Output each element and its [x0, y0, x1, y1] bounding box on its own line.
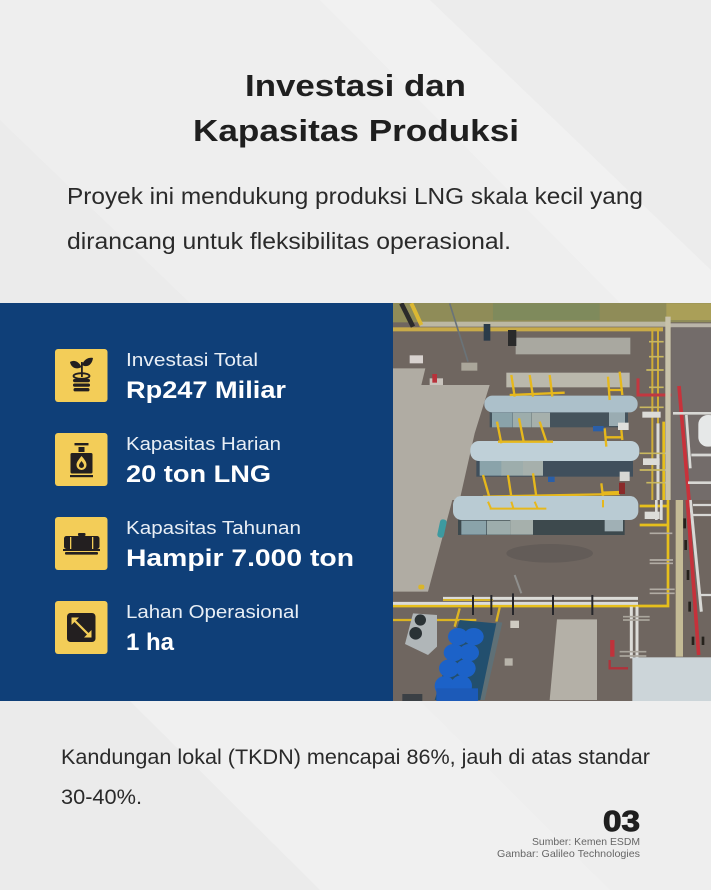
- footnote text: 30-40%.: [61, 786, 142, 809]
- stat: lahan operasional: [55, 601, 299, 656]
- intro text: [67, 183, 643, 254]
- stat: investasi total: [55, 349, 287, 404]
- value: Rp247 Miliar: [126, 377, 287, 404]
- panel: key figures: [0, 303, 393, 701]
- label: Lahan Operasional: [126, 602, 299, 622]
- value: 1 ha: [126, 629, 174, 656]
- value: 20 ton LNG: [126, 461, 271, 488]
- title: Investasi dan: [245, 68, 466, 103]
- label: Kapasitas Harian: [126, 434, 281, 454]
- yellow rigging: [483, 372, 623, 498]
- source credits: [497, 836, 640, 860]
- label: Investasi Total: [126, 350, 258, 370]
- module three top: [456, 496, 634, 498]
- source credits: Gambar: Galileo Technologies: [497, 848, 640, 860]
- value: Hampir 7.000 ton: [126, 545, 354, 572]
- icon: storage tank: [55, 517, 108, 570]
- icon: coins with sprout: [55, 349, 108, 402]
- icon: gas cylinder: [55, 433, 108, 486]
- pipe rack: [636, 328, 672, 500]
- label: Kapasitas Tahunan: [126, 518, 301, 538]
- source credits: Sumber: Kemen ESDM: [532, 836, 640, 848]
- module two: [476, 458, 633, 477]
- title: [193, 68, 519, 148]
- footnote text: [61, 746, 650, 809]
- intro text: Proyek ini mendukung produksi LNG skala kecil yang: [67, 183, 643, 209]
- module one: [490, 412, 628, 428]
- icon: area expand arrows: [55, 601, 108, 654]
- horizontal pipes: [393, 500, 668, 606]
- photo: LNG plant aerial view: [393, 303, 711, 702]
- title: Kapasitas Produksi: [193, 113, 519, 148]
- intro text: dirancang untuk fleksibilitas operasional.: [67, 228, 511, 254]
- stat: kapasitas tahunan: [55, 517, 354, 572]
- lower equipment: [631, 607, 637, 658]
- footnote text: Kandungan lokal (TKDN) mencapai 86%, jauh di atas standar: [61, 746, 650, 769]
- page number: 03: [603, 806, 640, 838]
- stat: kapasitas harian: [55, 433, 281, 488]
